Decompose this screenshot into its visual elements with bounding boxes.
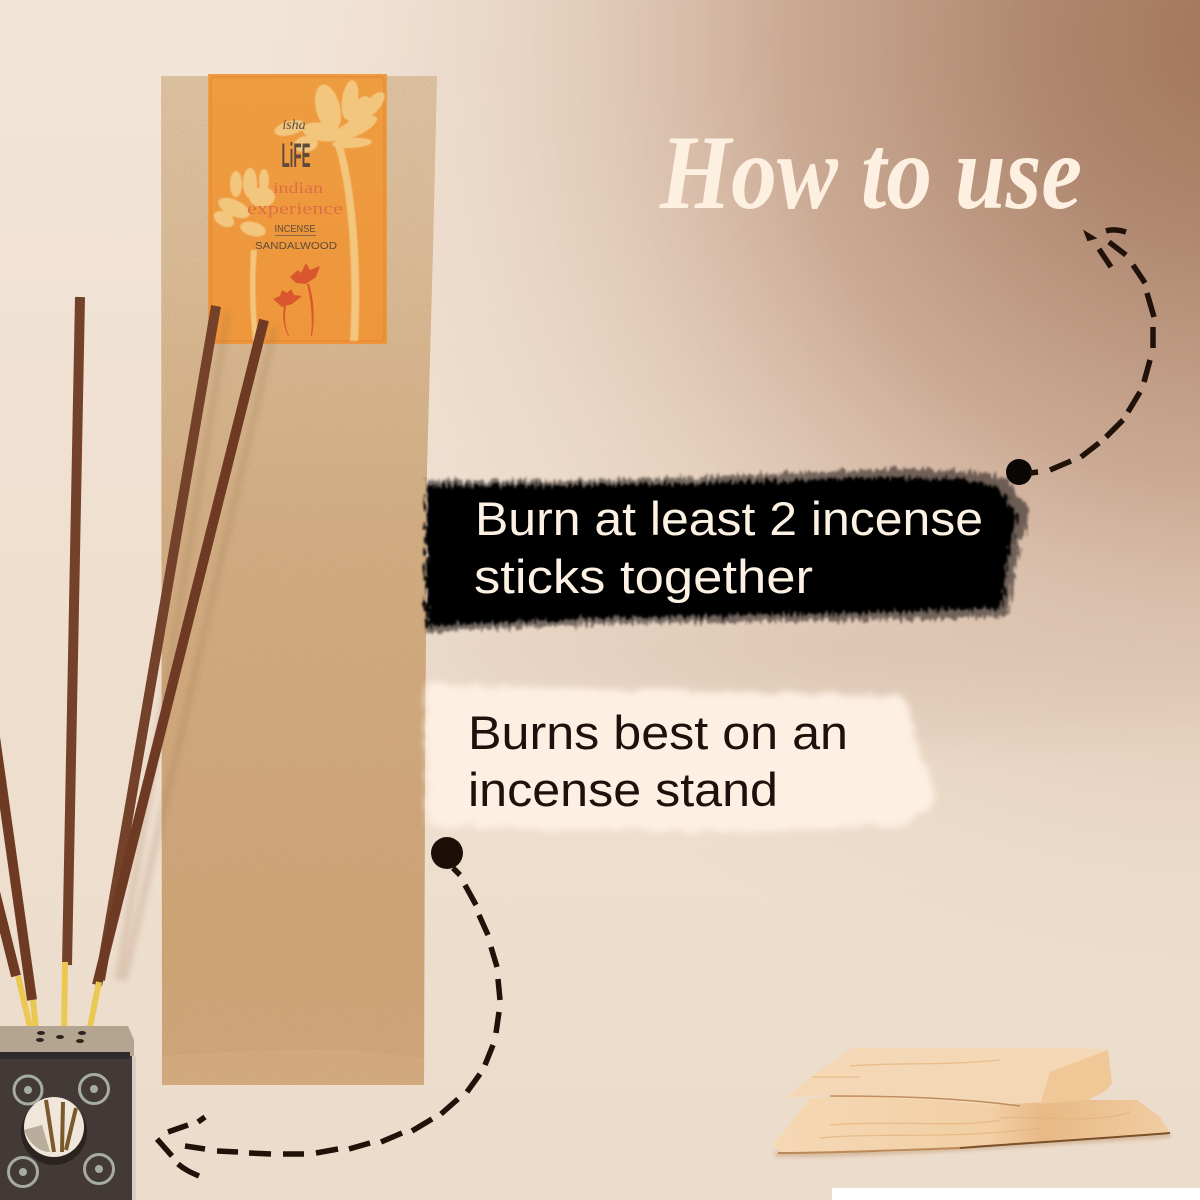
- black brush callout: [426, 469, 1030, 632]
- callout text: sticks together: [474, 550, 813, 603]
- stick: centre leaning: [100, 306, 216, 980]
- brand logo: [282, 118, 310, 175]
- product name: indian: [273, 180, 323, 197]
- product label: SANDALWOOD: [255, 241, 337, 252]
- arrow: to heading: [1006, 230, 1154, 485]
- cream brush callout: [426, 684, 936, 832]
- brand logo: isha: [282, 118, 306, 133]
- heading: How to use: [659, 114, 1082, 231]
- product label: LiFE: [282, 137, 310, 175]
- callout text: Burns best on an: [468, 706, 848, 759]
- stick: far left lower: [0, 880, 16, 976]
- callout text: Burn at least 2 incense: [475, 492, 983, 545]
- arrow: to stand: [157, 837, 500, 1176]
- callout text: incense stand: [468, 763, 778, 816]
- stick: right leaning: [97, 320, 264, 985]
- stick: back vertical: [67, 297, 80, 965]
- product label: [208, 74, 389, 344]
- lotus watermark large: [273, 79, 389, 341]
- kraft paper packet: [161, 74, 437, 1085]
- red lotus flowers: [273, 263, 320, 336]
- incense stand: [0, 1026, 136, 1200]
- product label: INCENSE: [274, 224, 316, 235]
- incense sticks: [0, 297, 275, 1042]
- stick: far left: [0, 730, 32, 1000]
- bamboo yellow ends: [18, 962, 99, 1042]
- lotus watermark small: [211, 168, 275, 341]
- sandalwood pieces: [773, 1048, 1170, 1154]
- product label: experience: [247, 199, 343, 218]
